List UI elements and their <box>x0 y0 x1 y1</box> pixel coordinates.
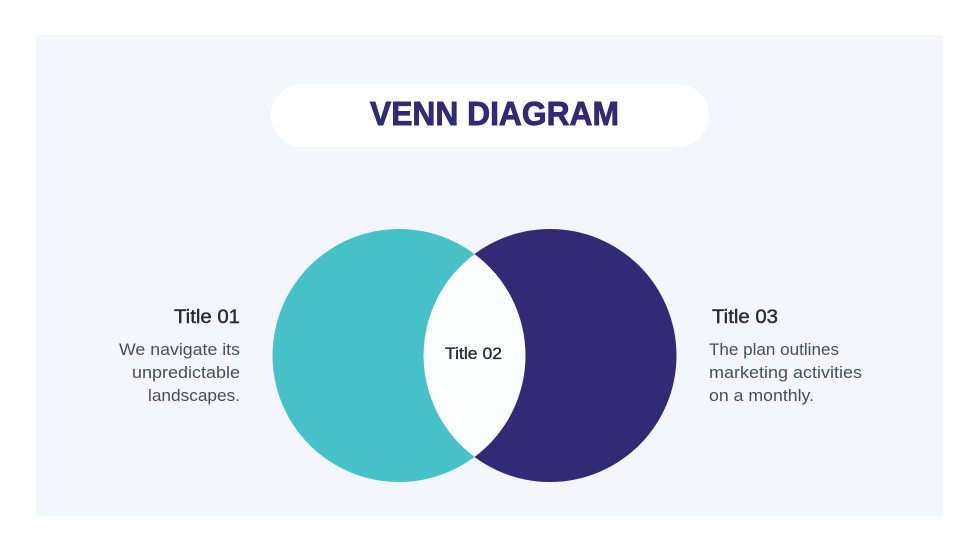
subheading: title 01: Title 01 <box>174 307 240 328</box>
text block: title 01 <box>119 307 240 405</box>
body copy: title 01: landscapes. <box>148 386 240 405</box>
pill background <box>271 84 709 147</box>
circle: right navy <box>424 229 676 482</box>
intersection lens <box>423 254 526 457</box>
label: title 02: Title 02 <box>445 345 502 363</box>
heading: VENN DIAGRAM <box>370 95 619 132</box>
body copy: title 03: on a monthly. <box>709 386 814 405</box>
circle: left teal <box>272 229 526 482</box>
body copy: title 03 <box>709 340 862 405</box>
title pill <box>271 84 709 147</box>
body copy: title 01 <box>119 340 240 405</box>
body copy: title 03: marketing activities <box>709 363 862 382</box>
venn diagram <box>272 229 676 482</box>
body copy: title 01: We navigate its <box>119 340 240 359</box>
body copy: title 03: The plan outlines <box>709 340 839 359</box>
subheading: title 03: Title 03 <box>712 307 778 328</box>
body copy: title 01: unpredictable <box>132 363 240 382</box>
text block: title 03 <box>709 307 862 405</box>
